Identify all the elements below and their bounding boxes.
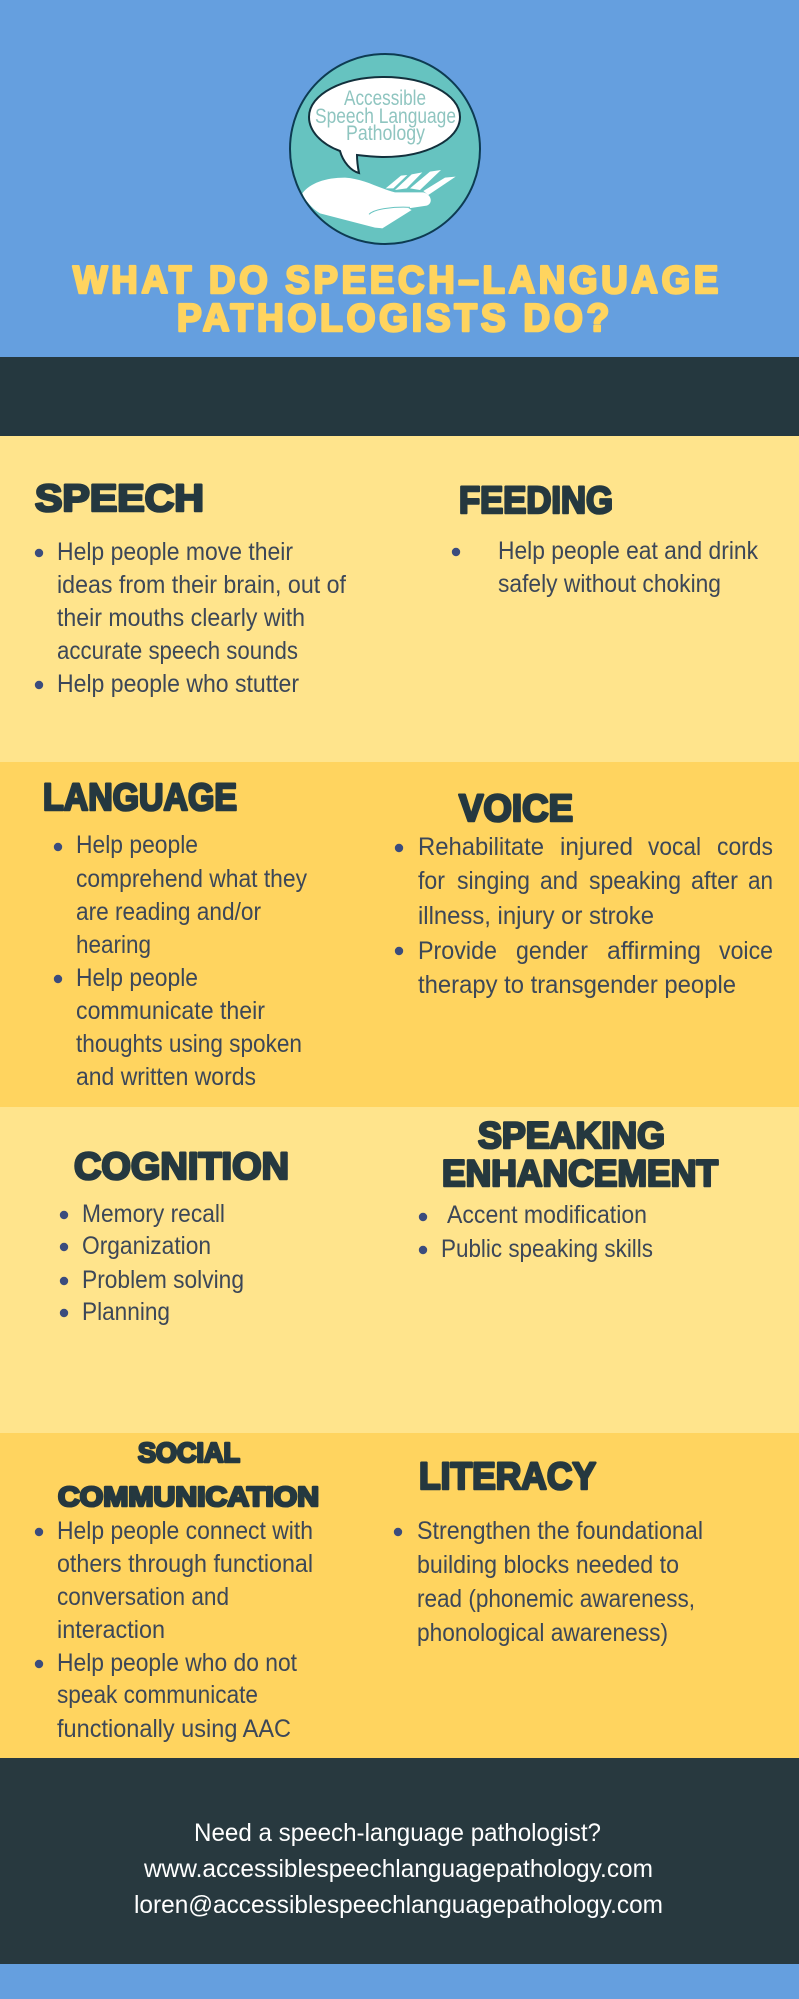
voice bullet list: voice	[719, 937, 773, 965]
voice bullet list: speaking	[589, 867, 681, 895]
heading: social communication: COMMUNICATION	[58, 1481, 319, 1512]
literacy bullet list: building blocks needed to	[417, 1551, 679, 1579]
heading: literacy: LITERACY	[419, 1456, 596, 1498]
speech bullet list: Help people who stutter	[57, 670, 299, 698]
row 3 background	[0, 1107, 799, 1433]
logo wordmark: Pathology	[346, 122, 425, 145]
panel: cognition	[60, 1146, 289, 1326]
voice bullet list: therapy to transgender people	[418, 971, 736, 999]
voice bullet list: cords	[717, 833, 773, 861]
social communication bullet list: Help people who do not	[57, 1649, 297, 1677]
logo	[290, 54, 480, 244]
footer contact text: Need a speech-language pathologist?	[194, 1819, 601, 1847]
language bullet list: communicate their	[76, 997, 265, 1025]
speaking enhancement bullet list	[419, 1201, 653, 1263]
voice bullet list: Rehabilitate	[418, 833, 544, 861]
voice bullet list: for	[418, 867, 445, 895]
voice bullet list: affirming	[607, 937, 701, 965]
header band	[0, 0, 799, 357]
speaking enhancement bullet list: Public speaking skills	[441, 1235, 653, 1263]
voice bullet list: singing	[457, 867, 530, 895]
panel: social communication	[35, 1437, 319, 1743]
language bullet list: Help people	[76, 964, 198, 992]
literacy bullet list: read (phonemic awareness,	[417, 1585, 695, 1613]
heading: speaking enhancement: SPEAKING	[478, 1115, 665, 1156]
logo wordmark	[315, 87, 456, 145]
speaking enhancement bullet list: Accent modification	[447, 1201, 647, 1229]
footer contact text: loren@accessiblespeechlanguagepathology.com	[134, 1891, 663, 1919]
heading: speech: SPEECH	[35, 478, 204, 520]
social communication bullet list: Help people connect with	[57, 1517, 313, 1545]
footer contact text: www.accessiblespeechlanguagepathology.com	[143, 1855, 653, 1883]
panel: voice	[395, 788, 773, 999]
row 4 background	[0, 1433, 799, 1758]
heading: voice: VOICE	[459, 788, 573, 830]
panel: feeding	[452, 480, 758, 598]
feeding bullet list: Help people eat and drink	[498, 537, 758, 565]
social communication bullet list: conversation and	[57, 1583, 229, 1611]
panel: speaking enhancement	[419, 1115, 718, 1263]
social communication bullet list: others through functional	[57, 1550, 313, 1578]
language bullet list: hearing	[76, 931, 151, 959]
title: PATHOLOGISTS DO?	[177, 297, 613, 340]
cognition bullet list: Problem solving	[82, 1266, 244, 1294]
language bullet list: comprehend what they	[76, 865, 307, 893]
voice bullet list: an	[748, 867, 773, 895]
heading: feeding: FEEDING	[459, 480, 613, 522]
language bullet list: thoughts using spoken	[76, 1030, 302, 1058]
voice bullet list: injured	[560, 833, 633, 861]
title	[73, 259, 722, 340]
icon: open hand	[302, 170, 456, 228]
literacy bullet list: phonological awareness)	[417, 1619, 668, 1647]
language bullet list	[54, 831, 307, 1091]
heading: speaking enhancement: ENHANCEMENT	[442, 1153, 718, 1194]
social communication bullet list: interaction	[57, 1616, 165, 1644]
literacy bullet list: Strengthen the foundational	[417, 1517, 703, 1545]
bottom band	[0, 1964, 799, 1999]
panel: speech	[35, 478, 346, 698]
voice bullet list: illness, injury or stroke	[418, 902, 654, 930]
voice bullet list: gender	[516, 937, 588, 965]
row 2 background	[0, 762, 799, 1107]
footer contact text	[134, 1819, 663, 1919]
cognition bullet list	[60, 1200, 244, 1326]
social communication bullet list: speak communicate	[57, 1681, 258, 1709]
heading: social communication	[58, 1437, 319, 1512]
speech bullet list: Help people move their	[57, 538, 293, 566]
icon: speech bubble	[309, 77, 460, 173]
voice bullet list: Provide	[418, 937, 497, 965]
feeding bullet list: safely without choking	[498, 570, 721, 598]
language bullet list: and written words	[76, 1063, 256, 1091]
cognition bullet list: Organization	[82, 1232, 211, 1260]
voice bullet list	[395, 833, 773, 999]
footer band	[0, 1758, 799, 1964]
heading: cognition: COGNITION	[74, 1146, 289, 1188]
panel: language	[43, 777, 307, 1091]
heading: speaking enhancement	[442, 1115, 718, 1194]
row 1 background	[0, 436, 799, 762]
logo wordmark: Speech Language	[315, 105, 456, 128]
cognition bullet list: Memory recall	[82, 1200, 225, 1228]
speech bullet list: their mouths clearly with	[57, 604, 305, 632]
voice bullet list: after	[691, 867, 738, 895]
language bullet list: are reading and/or	[76, 898, 261, 926]
heading: social communication: SOCIAL	[138, 1437, 240, 1468]
social communication bullet list: functionally using AAC	[57, 1715, 291, 1743]
social communication bullet list	[35, 1517, 313, 1743]
voice bullet list: and	[540, 867, 578, 895]
panel: literacy	[394, 1456, 703, 1647]
heading: language: LANGUAGE	[43, 777, 237, 819]
feeding bullet list	[452, 537, 758, 598]
logo wordmark: Accessible	[344, 87, 426, 110]
literacy bullet list	[394, 1517, 703, 1647]
speech bullet list	[35, 538, 346, 698]
title: WHAT DO SPEECH–LANGUAGE	[73, 259, 722, 302]
language bullet list: Help people	[76, 831, 198, 859]
dark divider band	[0, 357, 799, 436]
speech bullet list: ideas from their brain, out of	[57, 571, 346, 599]
cognition bullet list: Planning	[82, 1298, 170, 1326]
voice bullet list: vocal	[648, 833, 701, 861]
speech bullet list: accurate speech sounds	[57, 637, 298, 665]
